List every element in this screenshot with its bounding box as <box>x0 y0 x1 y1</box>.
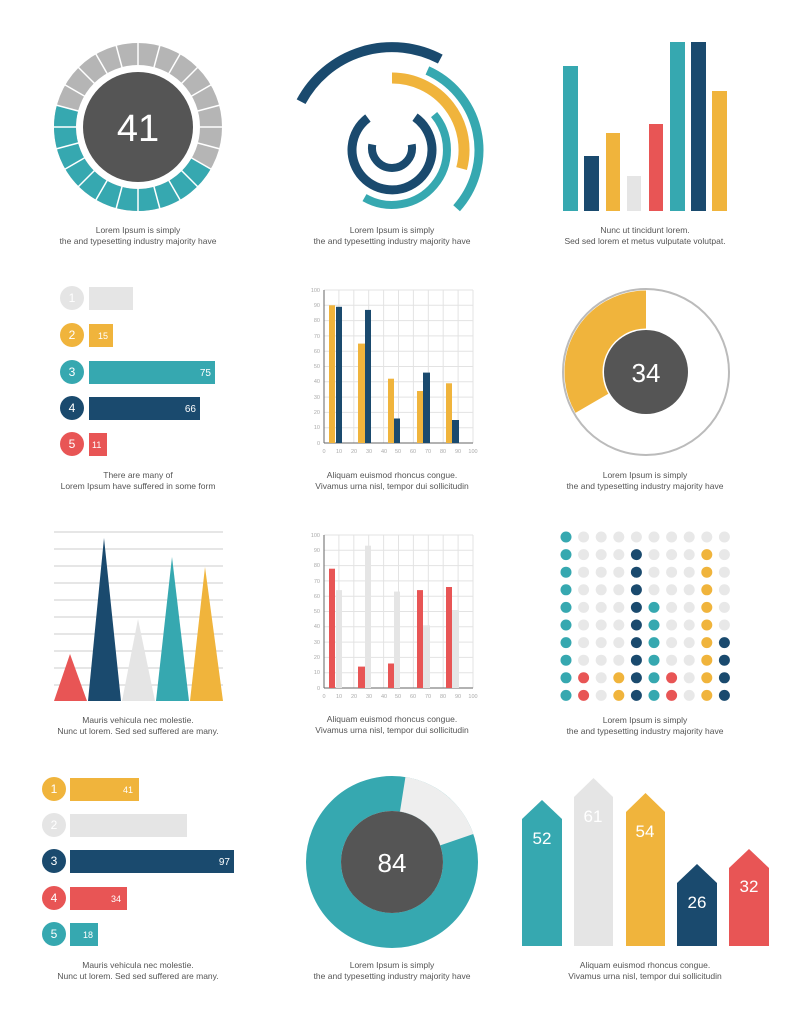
caption 2: Lorem Ipsum is simply <box>350 225 434 235</box>
grouped bar chart yellow/navy: 30 <box>314 395 320 401</box>
donut 84 <box>324 794 460 930</box>
grouped bar chart red/gray: 100 <box>311 533 320 539</box>
caption 3: Sed sed lorem et metus vulputate volutpat. <box>564 236 726 246</box>
concentric arcs <box>301 47 479 208</box>
caption 11: the and typesetting industry majority have <box>314 971 471 981</box>
grouped bar chart yellow/navy: 70 <box>314 334 320 340</box>
grouped bar chart yellow/navy: 20 <box>314 410 320 416</box>
grouped bar chart yellow/navy: 0 <box>317 441 320 447</box>
grouped bar chart red/gray: 0 <box>322 694 326 700</box>
grouped bar chart yellow/navy: 70 <box>425 449 431 455</box>
numbered bar list 1: 75 <box>200 368 211 379</box>
grouped bar chart yellow/navy: 80 <box>440 449 446 455</box>
caption 1: Lorem Ipsum is simply <box>96 225 180 235</box>
grouped bar chart red/gray: 0 <box>317 686 320 692</box>
triangle chart <box>54 532 223 701</box>
grouped bar chart yellow/navy: 100 <box>468 449 478 455</box>
grouped bar chart yellow/navy: 50 <box>395 449 401 455</box>
arrow bars: 32 <box>740 877 758 896</box>
numbered bar list 2: 34 <box>111 894 121 904</box>
grouped bar chart red/gray: 10 <box>314 670 320 676</box>
donut 34 <box>563 289 729 455</box>
numbered bar list 1: 5 <box>69 437 76 451</box>
grouped bar chart red/gray: 90 <box>455 694 461 700</box>
grouped bar chart yellow/navy: 90 <box>455 449 461 455</box>
arrow bars: 52 <box>533 829 551 848</box>
arrow bars: 61 <box>584 807 602 826</box>
arrow bars: 26 <box>688 893 706 912</box>
numbered bar list 1: 1 <box>69 291 76 305</box>
numbered bar list 2: 97 <box>219 857 230 868</box>
numbered bar list 1: 2 <box>69 328 76 342</box>
grouped bar chart yellow/navy: 20 <box>351 449 357 455</box>
grouped bar chart yellow/navy: 0 <box>322 449 326 455</box>
donut 34: 34 <box>632 358 660 388</box>
caption 10: Mauris vehicula nec molestie. <box>82 960 194 970</box>
numbered bar list 2: 3 <box>51 854 58 868</box>
numbered bar list 2: 1 <box>51 782 58 796</box>
caption 6: the and typesetting industry majority have <box>567 481 724 491</box>
grouped bar chart red/gray: 40 <box>314 624 320 630</box>
caption 5: Vivamus urna nisl, tempor dui sollicitudin <box>315 481 469 491</box>
numbered bar list 2: 2 <box>51 818 58 832</box>
grouped bar chart yellow/navy: 10 <box>336 449 342 455</box>
grouped bar chart yellow/navy: 90 <box>314 303 320 309</box>
grouped bar chart red/gray: 40 <box>381 694 387 700</box>
caption 9: Lorem Ipsum is simply <box>603 715 687 725</box>
numbered bar list 2: 4 <box>51 891 58 905</box>
grouped bar chart red/gray: 70 <box>425 694 431 700</box>
numbered bar list 1: 4 <box>69 401 76 415</box>
grouped bar chart red/gray: 80 <box>314 563 320 569</box>
ring chart 41: 41 <box>117 108 159 150</box>
caption 6: Lorem Ipsum is simply <box>603 470 687 480</box>
grouped bar chart red/gray: 60 <box>410 694 416 700</box>
caption 7: Nunc ut lorem. Sed sed suffered are many. <box>57 726 219 736</box>
ring chart 41 <box>38 27 238 227</box>
grouped bar chart yellow/navy: 40 <box>381 449 387 455</box>
numbered bar list 2: 41 <box>123 785 133 795</box>
grouped bar chart red/gray: 30 <box>366 694 372 700</box>
numbered bar list 1 <box>60 286 215 456</box>
arrow bars <box>522 778 769 946</box>
donut 84: 84 <box>378 848 406 878</box>
numbered bar list 1: 66 <box>185 404 196 415</box>
caption 8: Aliquam euismod rhoncus congue. <box>327 714 457 724</box>
grouped bar chart yellow/navy: 80 <box>314 318 320 324</box>
caption 7: Mauris vehicula nec molestie. <box>82 715 194 725</box>
numbered bar list 2: 18 <box>83 930 93 940</box>
numbered bar list 2: 5 <box>51 927 58 941</box>
grouped bar chart red/gray: 50 <box>395 694 401 700</box>
numbered bar list 1: 3 <box>69 365 76 379</box>
grouped bar chart red/gray: 20 <box>314 655 320 661</box>
grouped bar chart yellow/navy: 60 <box>410 449 416 455</box>
caption 9: the and typesetting industry majority have <box>567 726 724 736</box>
grouped bar chart yellow/navy: 60 <box>314 349 320 355</box>
grouped bar chart red/gray: 30 <box>314 640 320 646</box>
grouped bar chart red/gray: 70 <box>314 579 320 585</box>
caption 12: Vivamus urna nisl, tempor dui sollicitudin <box>568 971 722 981</box>
caption 8: Vivamus urna nisl, tempor dui sollicitudin <box>315 725 469 735</box>
numbered bar list 1: 15 <box>98 331 108 341</box>
caption 10: Nunc ut lorem. Sed sed suffered are many. <box>57 971 219 981</box>
grouped bar chart yellow/navy: 10 <box>314 425 320 431</box>
caption 4: Lorem Ipsum have suffered in some form <box>61 481 215 491</box>
grouped bar chart red/gray: 20 <box>351 694 357 700</box>
caption 12: Aliquam euismod rhoncus congue. <box>580 960 710 970</box>
caption 3: Nunc ut tincidunt lorem. <box>600 225 690 235</box>
dot matrix <box>560 532 730 701</box>
caption 5: Aliquam euismod rhoncus congue. <box>327 470 457 480</box>
grouped bar chart red/gray: 100 <box>468 694 478 700</box>
caption 11: Lorem Ipsum is simply <box>350 960 434 970</box>
grouped bar chart yellow/navy <box>311 288 478 455</box>
caption 4: There are many of <box>103 470 173 480</box>
grouped bar chart yellow/navy: 50 <box>314 364 320 370</box>
grouped bar chart yellow/navy: 100 <box>311 288 320 294</box>
grouped bar chart yellow/navy: 40 <box>314 379 320 385</box>
arrow bars: 54 <box>636 822 654 841</box>
grouped bar chart red/gray: 60 <box>314 594 320 600</box>
grouped bar chart red/gray: 80 <box>440 694 446 700</box>
numbered bar list 1: 11 <box>92 440 101 450</box>
grouped bar chart red/gray: 90 <box>314 548 320 554</box>
grouped bar chart red/gray <box>311 533 478 700</box>
grouped bar chart red/gray: 50 <box>314 609 320 615</box>
numbered bar list 2 <box>42 777 234 946</box>
vertical bar chart <box>563 42 727 211</box>
caption 1: the and typesetting industry majority have <box>60 236 217 246</box>
caption 2: the and typesetting industry majority have <box>314 236 471 246</box>
grouped bar chart yellow/navy: 30 <box>366 449 372 455</box>
grouped bar chart red/gray: 10 <box>336 694 342 700</box>
